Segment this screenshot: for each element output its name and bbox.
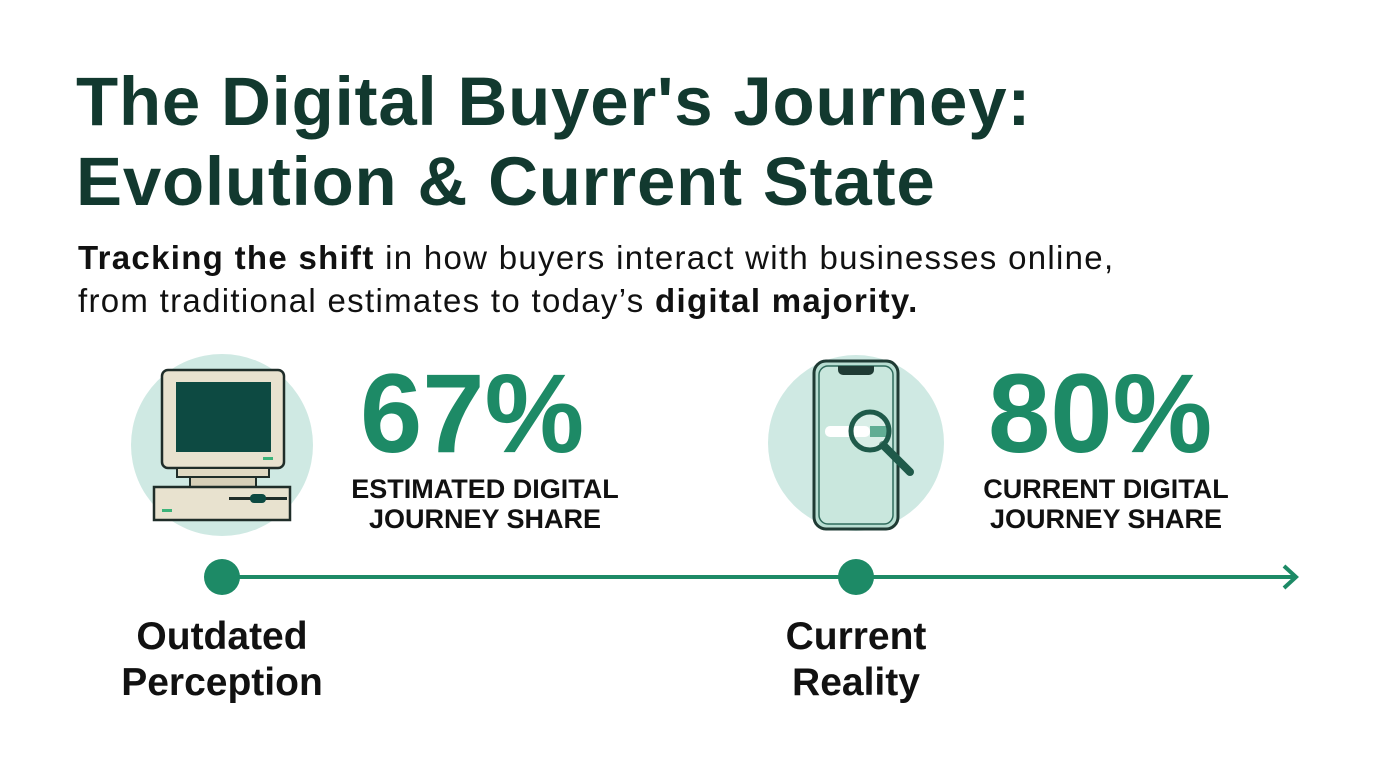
stat: 67% <box>351 351 619 534</box>
timeline arrow <box>204 559 1299 595</box>
stat: 67%: ESTIMATED DIGITAL <box>351 474 619 504</box>
stat: 67%: JOURNEY SHARE <box>369 504 601 534</box>
label: outdated perception: Perception <box>121 661 323 704</box>
title: Evolution & Current State <box>76 143 936 220</box>
stat: 80%: JOURNEY SHARE <box>990 504 1222 534</box>
title: The Digital Buyer's Journey: <box>76 63 1031 140</box>
icon: smartphone with magnifier <box>768 355 944 531</box>
subtitle: from traditional estimates to today’s digital majority. <box>78 282 919 319</box>
label: current reality: Reality <box>792 661 920 704</box>
title <box>76 63 1031 220</box>
stat: 80%: CURRENT DIGITAL <box>983 474 1229 504</box>
stat: 67%: 67% <box>360 351 584 476</box>
stat: 80%: 80% <box>988 351 1212 476</box>
label: outdated perception: Outdated <box>136 615 308 658</box>
label: current reality: Current <box>786 615 926 658</box>
subtitle: Tracking the shift in how buyers interact with businesses online, <box>78 239 1114 276</box>
label: current reality <box>786 615 926 704</box>
label: outdated perception <box>121 615 323 704</box>
icon: retro computer <box>131 354 313 536</box>
stat: 80% <box>983 351 1229 534</box>
subtitle <box>78 239 1114 319</box>
